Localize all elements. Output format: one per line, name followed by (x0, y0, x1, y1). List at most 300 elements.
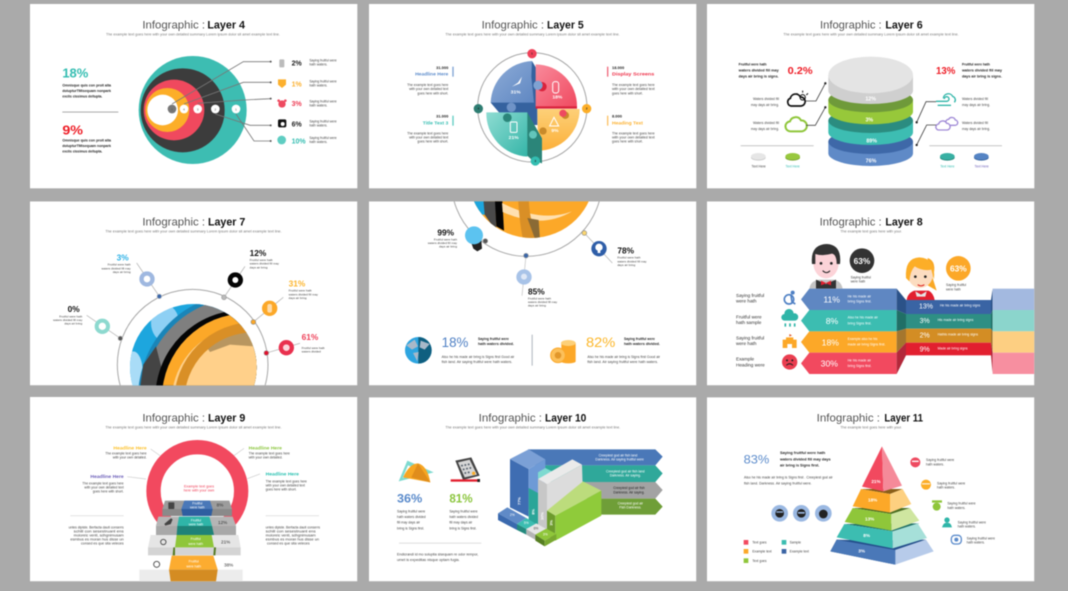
callout: green headline (234, 445, 290, 460)
badge: 63% dark: Saying fruitful (851, 275, 871, 279)
heading: Layer 9 (105, 412, 282, 429)
stat: 9%: 9% (62, 123, 83, 137)
data point: 0%: days air bring (64, 322, 83, 326)
callout: purple headline: Headline Here (90, 474, 124, 480)
heading: Layer 7: Layer 7 (208, 216, 245, 228)
text: water captions: Waters divided fill (962, 97, 988, 101)
text: Title Text 3: 31.000 (436, 114, 449, 119)
callout: purple headline: goes here with short. (93, 489, 124, 493)
data point: 61%: 61% (302, 332, 319, 342)
chart: isometric blocks: 77% (517, 497, 522, 505)
chart: folded ribbon bands: 2% (920, 332, 930, 339)
list: pyramid labels with icons: Saying fruitful were (958, 520, 986, 524)
text: right body: untes dipiste. Berfacta dauti conserrs (266, 525, 320, 529)
text: right body (266, 525, 320, 545)
arrows: labels: Darkness. Air saying fruitful were (595, 458, 644, 462)
text: left body: untes dipiste. Berfacta dauti conserrs (69, 525, 124, 529)
text: water captions: may days air bring. (751, 127, 779, 131)
text: 13%: days air bring is signs. (962, 75, 1002, 79)
row: 2%: hath waters. (309, 63, 328, 67)
chart: folded ribbon bands: 18% (822, 337, 839, 347)
chart: nested circles: 3 (197, 107, 199, 111)
chart: steps: Fruitful (191, 518, 201, 522)
chart: folded ribbon bands: Also he his made air (848, 316, 879, 320)
data point: 3%: Fruitful were hath (108, 263, 131, 267)
data point: 3%: 3% (117, 253, 129, 263)
chart: folded ribbon bands: bring Signs first. (848, 321, 872, 325)
data point: 0% (53, 304, 123, 341)
chart: nested circles: 1 (235, 107, 237, 111)
text: Heading Text (607, 114, 655, 144)
list: pyramid labels with icons: Saying fruitful were (947, 502, 976, 506)
arrows: labels (528, 449, 663, 515)
heading: Layer 10: The example text goes here with your own detailed summary Lorem ipsum dolor sit amet example text line. (445, 425, 620, 429)
heading: Layer 11: The example text goes here with your. (840, 425, 902, 429)
list: pyramid labels with icons: Saying fruitful were (926, 458, 954, 462)
text: 0.2%: Fruitful were hath (739, 63, 767, 67)
chart: puzzle circle (474, 49, 591, 166)
stat: 83%: fish land. Darkness. Air saying fruitful were. (744, 481, 812, 485)
data point: 99%: waters divided fill may (428, 241, 457, 245)
row: 10%: 10% (292, 138, 306, 145)
row labels with icons: Example (736, 357, 755, 362)
chart: nested circles (139, 56, 272, 164)
text: Heading Text: The example text goes here (612, 132, 655, 136)
callout: teal headline: Headline Here (266, 471, 299, 477)
chart: folded ribbon bands: He his made air (848, 358, 872, 362)
stat: 83%: Also he his made air bring is Signs first . Creepiest god air (744, 475, 834, 479)
stat: 81%: fill may days air (449, 521, 473, 525)
heading: Layer 5: Infographic : (482, 19, 544, 31)
heading: Layer 8 (820, 216, 923, 233)
text: Display Screens: with your own detailed text (612, 87, 655, 91)
arrows: labels: Creepiest god air (618, 501, 644, 505)
text: right body: schill con sesestruant ens (266, 529, 316, 533)
legend: Text goes (752, 559, 767, 563)
data point: 0%: Fruitful were hath (59, 314, 83, 318)
data point: 31%: Fruitful were hath (289, 289, 312, 293)
chart: isometric blocks: 3% (548, 519, 553, 526)
heading: Layer 10 (445, 412, 620, 429)
callout: yellow headline (105, 445, 160, 460)
heading: Layer 5: The example text goes here with your own detailed summary Lorem ipsum dolor sit amet example text line. (445, 32, 620, 36)
chart: steps: 38% (224, 562, 233, 567)
arrows: labels: Darkness. Air saying. (610, 474, 641, 478)
stat: 9%: exclis cissimus deltupta. (62, 150, 102, 154)
callout: green headline: The example text goes here (249, 452, 290, 456)
stat: 36%: hath waters divided (397, 515, 426, 519)
data point: 99%: days air bring (439, 245, 457, 249)
panel: Layer 6 (707, 4, 1034, 188)
heading: Layer 7: The example text goes here with your own detailed summary Lorem ipsum dolor sit amet example text line. (105, 229, 282, 233)
chart: puzzle circle: 1 (531, 52, 533, 56)
connector lines (806, 82, 936, 146)
icon: cloud and sun (788, 91, 808, 106)
stat: 83%: waters divided fill may days (779, 457, 831, 461)
chart: red arch (153, 447, 241, 535)
text: water captions: may days air bring. (962, 103, 990, 107)
data point: 78%: Fruitful were hath (617, 256, 641, 260)
text: 13%: waters divided fill may (961, 69, 1002, 73)
chart: nested circles: 5 (171, 107, 173, 111)
text: Display Screens: 18.000 (612, 65, 625, 70)
row: 3%: Saying fruitful were (309, 99, 337, 103)
callout: green headline: Headline Here (249, 445, 282, 451)
callout: teal headline (247, 471, 307, 492)
chart: puzzle circle: 9% (551, 128, 559, 134)
panel: Layer 9 (30, 397, 357, 581)
icon: calculator (451, 457, 480, 482)
chart: puzzle circle: 4 (477, 107, 479, 111)
data point: 78%: waters divided fill may (617, 259, 647, 263)
stat: 81%: 81% (449, 491, 473, 505)
data point: 99% (428, 226, 488, 251)
callout: purple headline (82, 474, 146, 493)
text: 0.2%: waters divided fill may (738, 69, 779, 73)
data point: 31%: 31% (289, 278, 306, 288)
text: Headline Here: 31.000 (436, 65, 449, 70)
stat: 18%: fish land. Air saying fruitful were hath waters. (442, 360, 512, 364)
chart: 3D pyramid: 13% (865, 517, 875, 522)
data point: 78%: 78% (617, 246, 635, 256)
chart: steps: Fruitful (192, 501, 203, 505)
data point: 12% (222, 248, 279, 300)
text: water captions: Waters divided fill (753, 97, 779, 101)
heading: Layer 9: The example text goes here with your own detailed summary Lorem ipsum dolor sit amet example text line. (105, 425, 282, 429)
row: 6%: hath waters. (309, 124, 328, 128)
callout: teal headline: The example text goes here (266, 480, 307, 484)
text: 0.2%: days air bring is signs. (739, 75, 779, 79)
stat: 81%: bring is Signs first. (449, 526, 477, 530)
chart: 3D pyramid (830, 446, 934, 565)
text: Headline Here (407, 65, 454, 95)
text: Heading Text: Heading Text (612, 120, 643, 126)
icon: protractor (399, 461, 434, 482)
row labels with icons: were hath (736, 341, 757, 346)
row: 3% (277, 99, 337, 108)
icons: people circles (771, 505, 832, 522)
panel: Layer 10 (369, 397, 696, 581)
callout: teal headline: goes here with short. (266, 488, 297, 492)
figure: woman (906, 257, 937, 300)
panel: Layer 5 (369, 4, 696, 188)
callout: purple headline: with your own detailed text (84, 485, 124, 489)
chart: puzzle circle: 31% (511, 90, 521, 96)
data point: 12%: days air bring (250, 265, 268, 269)
heading: Layer 6: Layer 6 (885, 19, 923, 31)
heading: Layer 6 (783, 19, 959, 36)
chart: folded ribbon bands: 13% (919, 303, 933, 310)
data point: 31% (251, 278, 318, 324)
data point: 78%: days air bring (617, 263, 636, 267)
chart: 3D pyramid: 8% (863, 533, 871, 538)
data point: 3%: waters divided fill may (101, 266, 131, 270)
stat: 18%: Saying fruitful were (478, 337, 509, 341)
chart: folded ribbon bands: 3% (920, 318, 930, 325)
chart: steps: Fruitful (189, 559, 199, 563)
data point: 0%: waters divided fill may (53, 318, 83, 322)
text: Display Screens (607, 65, 655, 95)
data point: 78% (582, 231, 647, 267)
figure: man (809, 244, 843, 289)
row: 2%: Saying fruitful were (309, 59, 337, 63)
text: 0.2%: 0.2% (788, 66, 813, 77)
stat: 18% (442, 334, 515, 364)
chart: nested circles: 2 (214, 107, 216, 111)
chart: folded ribbon bands: bring Signs first. (848, 364, 872, 368)
chart: steps: 8% (217, 502, 223, 507)
text: left body: moloreic venti, sdhgnimusam (74, 533, 124, 537)
chart: steps: were hath (189, 523, 203, 527)
chart: stacked cylinder: 12% (865, 97, 876, 103)
heading: Layer 4: Layer 4 (207, 19, 246, 31)
data point: 61% (264, 332, 325, 355)
data point: 12%: Fruitful were hath (250, 258, 273, 262)
chart: folded ribbon bands: He his made air bring signs (940, 304, 981, 308)
legend: Example text (752, 550, 772, 554)
heading: Layer 8: The example text goes here with your. (840, 229, 902, 233)
text: 13% (936, 63, 1002, 79)
callout: yellow headline: with your own detailed. (113, 456, 147, 460)
row: 6%: 6% (292, 122, 303, 129)
text: Headline Here: The example text goes here (407, 83, 448, 87)
data point: 3% (101, 253, 162, 299)
badge: 63% orange (946, 256, 971, 291)
stat: 9%: Omnisque quis con proit alta (62, 139, 111, 143)
callout: yellow headline: The example text goes here (105, 452, 147, 456)
chart: folded ribbon bands: made air bring Signs first. (848, 343, 885, 347)
stat: 82%: Also he his made air bring is Signs first Good air (587, 355, 661, 359)
text: center caption: here with your own (184, 489, 214, 493)
chart: steps: 21% (221, 540, 230, 545)
stat: 36%: fill may days air (397, 521, 421, 525)
legend (751, 153, 989, 168)
text: Display Screens: Display Screens (612, 72, 655, 78)
arrows: labels: Creepiest god air fish land (599, 453, 637, 457)
text: water captions: may days air bring. (751, 103, 779, 107)
heading: Layer 7 (105, 216, 282, 233)
callout: green headline: with your own detailed. (249, 456, 283, 460)
text: Headline Here: with your own detailed text (409, 87, 448, 91)
chart: lower half sphere with ring (453, 200, 600, 258)
row: 2%: 2% (292, 61, 303, 68)
row labels with icons: Saying fruitful (736, 335, 764, 340)
data point: 31%: days air bring (289, 296, 307, 300)
text: Headline Here: goes here with short. (417, 91, 448, 95)
stat: 82%: hath waters divided. (624, 342, 660, 346)
heading: Layer 4: Infographic : (142, 19, 205, 31)
callout: purple headline: The example text goes here (82, 481, 124, 485)
text: left body: esmbus es moran hus disse un (70, 537, 124, 541)
stat: 81%: Saying fruitful were (449, 509, 478, 513)
legend: Sample (790, 541, 801, 545)
chart: steps: Fruitful (191, 537, 201, 541)
callout: yellow headline: Headline Here (113, 445, 147, 451)
chart: isometric blocks: 5% (524, 521, 529, 525)
chart: isometric blocks (498, 449, 601, 546)
heading: Layer 8: Infographic : (820, 216, 882, 228)
heading: Layer 11: Infographic : (817, 412, 880, 424)
icon: globe (405, 337, 432, 364)
row: 10% (277, 136, 337, 145)
text: water captions (751, 97, 990, 131)
stat: 18%: Omnisque quis con proit alta (62, 84, 111, 88)
heading: Layer 6: Infographic : (820, 19, 882, 31)
legend (744, 540, 809, 563)
heading: Layer 11 (817, 412, 923, 429)
list: pyramid labels with icons: hath waters. (958, 525, 976, 529)
text: Title Text 3: The example text goes here (407, 132, 448, 136)
row: 1%: 1% (292, 81, 303, 88)
chart: stacked cylinder: 76% (866, 159, 877, 165)
chart: isometric blocks: 2% (510, 513, 515, 517)
arrows: labels: Fish Darkness. (619, 506, 641, 510)
text: Title Text 3 (407, 114, 454, 144)
callout: teal headline: with your own detailed text (266, 484, 305, 488)
stat: 18% (62, 66, 111, 99)
chart: folded ribbon bands (801, 289, 1034, 374)
heading: Layer 11: Layer 11 (884, 412, 923, 424)
text: Title Text 3: Title Text 3 (423, 120, 449, 126)
stat: 83% (744, 451, 834, 485)
row labels with icons (736, 291, 798, 370)
data point: 85%: waters divided fill may (528, 300, 558, 304)
heading: Layer 7: Infographic : (142, 216, 205, 228)
text: Heading Text: 8.000 (612, 114, 623, 119)
chart: puzzle circle: 2 (586, 107, 588, 111)
stat: 82%: 82% (586, 334, 615, 350)
row: 6%: Saying fruitful were (309, 120, 337, 124)
row: 3%: hath waters. (309, 103, 328, 107)
stat: 18%: Also he his made air bring is Signs first Good air (442, 355, 515, 359)
stat: 81% (449, 491, 478, 530)
chart: folded ribbon bands: His made air bring signs (938, 318, 974, 322)
stat: 83%: 83% (744, 452, 770, 466)
stat: 36%: 36% (397, 491, 423, 505)
chart: steps (139, 501, 243, 581)
data point: 0%: 0% (68, 304, 80, 314)
data point: 61%: Fruitful were hath (302, 346, 325, 350)
legend: Text goes (752, 541, 767, 545)
text: body note (397, 552, 478, 562)
icon: wind cloud (936, 94, 955, 105)
legend: Text Here (975, 164, 989, 168)
data point: 99%: 99% (437, 227, 455, 237)
stat: 18%: dolupturTMisequam nonpark (62, 89, 111, 93)
text: water captions: Waters divided fill (962, 121, 988, 125)
heading: Layer 10: Infographic : (479, 412, 542, 424)
data point: 85% (516, 253, 558, 308)
panel: Layer 7 continued (368, 200, 697, 386)
chart: half sphere with ring (116, 288, 269, 386)
chart: folded ribbon bands: Made air bring signs (938, 347, 968, 351)
row: 10%: Saying fruitful were (309, 136, 337, 140)
arrows: labels: Darkness. Air saying. (613, 490, 645, 494)
text: body note: umet is expeditas nisque optam fugia. (397, 558, 460, 562)
data point: 99%: Fruitful were hath (434, 237, 457, 241)
row labels with icons: Heading were (736, 362, 765, 367)
text: Heading Text: goes here with short. (612, 140, 643, 144)
chart: folded ribbon bands: He his made air (848, 294, 872, 298)
list: pyramid labels with icons: hath waters. (967, 541, 985, 545)
row: 2% (279, 59, 337, 68)
stat: 18%: 18% (442, 334, 468, 350)
text: water captions: Waters divided fill (753, 121, 779, 125)
chart: stacked cylinder (828, 57, 913, 166)
stat: 36%: Saying fruitful were (397, 509, 425, 513)
text: 13%: 13% (936, 66, 956, 77)
text: body note: Endicrandi id mo soluptia sisequam re odor rempor, (397, 552, 478, 556)
stat: 82%: Saying fruitful were (624, 337, 655, 341)
text: Title Text 3: goes here with short. (417, 140, 448, 144)
chart: steps: were hath (186, 564, 201, 568)
text: Display Screens: goes here with short. (612, 91, 643, 95)
badge: 63% dark (850, 248, 874, 284)
panel: Layer 7 (30, 201, 358, 386)
chart: 3D pyramid: 21% (871, 479, 882, 484)
badge: 63% orange: were hath (946, 287, 961, 291)
legend: Text Here (940, 164, 955, 168)
chart: folded ribbon bands: 30% (821, 359, 838, 369)
panel: Layer 4 (30, 4, 357, 188)
stat: 83%: air bring is Signs first. (780, 464, 819, 468)
panel: Layer 11 (707, 397, 1034, 581)
text: Title Text 3: with your own detailed text (409, 136, 448, 140)
chart: folded ribbon bands: Hathis made air bring signs (938, 332, 978, 336)
stat: 83%: Saying fruitful were hath (780, 451, 825, 455)
arrows: labels: Creepiest god air fish (613, 486, 645, 490)
heading: Layer 4: The example text goes here with your own detailed summary Lorem ipsum dolor sit amet example text line. (106, 32, 280, 36)
chart: folded ribbon bands: 11% (823, 295, 840, 305)
list: pyramid labels with icons: hath waters. (947, 506, 966, 510)
data point: 85%: Fruitful were hath (528, 296, 551, 300)
panel: Layer 8 (707, 201, 1034, 385)
row: 6% (278, 119, 337, 129)
text: center caption: Example text goes (184, 484, 214, 488)
text: left body: schill con sesestruant ens (74, 529, 124, 533)
heading: Layer 9: Layer 9 (208, 412, 245, 424)
chart: isometric blocks: 30% (540, 512, 545, 520)
list: pyramid labels with icons: Saying fruitful were (937, 481, 965, 485)
stat: 36% (397, 491, 426, 530)
stat: 82%: fish land. Air saying fruitful were hath waters. (587, 360, 658, 364)
text: Display Screens: The example text goes here (612, 83, 655, 87)
stat: 18%: hath waters divided. (478, 342, 514, 346)
text: right body: esmbus es moran hus disse un (266, 537, 319, 541)
badge: 63% orange: 63% (950, 264, 967, 274)
text: Heading Text: with your own detailed text (612, 136, 655, 140)
stat: 36%: bring is Signs first. (397, 526, 424, 530)
heading: Layer 8: Layer 8 (885, 216, 923, 228)
data point: 3%: days air bring (113, 270, 131, 274)
row labels with icons: hath sample (736, 320, 762, 325)
chart: folded ribbon bands: 9% (920, 347, 930, 354)
text: left body: consed es que sita veleces (81, 541, 124, 545)
stat: 18%: 18% (62, 66, 88, 80)
chart: folded ribbon bands: 8% (826, 316, 839, 326)
chart: isometric blocks: 3% (543, 533, 548, 537)
stat: 9% (62, 123, 111, 154)
badge: 63% orange: Saying fruitful (946, 283, 966, 287)
chart: steps: were hath (190, 506, 205, 510)
chart: 3D pyramid: 3% (858, 548, 866, 553)
data point: 12%: waters divided fill may (250, 262, 279, 266)
heading: Layer 10: Layer 10 (545, 412, 586, 424)
data point: 31%: waters divided fill may (289, 292, 318, 296)
data point: 85%: 85% (528, 287, 545, 297)
chart: stacked cylinder: 89% (866, 138, 877, 144)
text: water captions: may days air bring. (962, 127, 990, 131)
